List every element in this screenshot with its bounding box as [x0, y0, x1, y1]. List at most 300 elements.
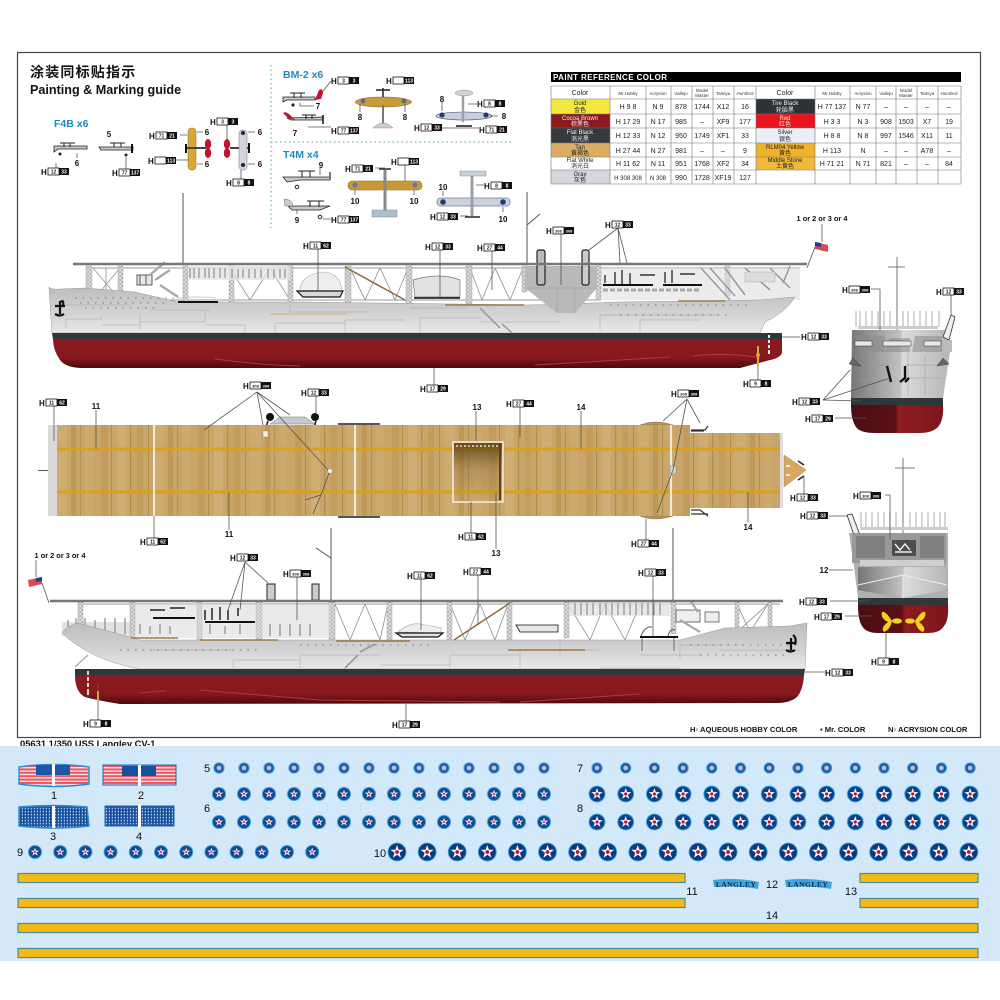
callout tags: top ship: [303, 221, 829, 394]
tag H27/44: [463, 568, 491, 577]
paint table codes, right half: –: [904, 161, 908, 168]
tag H27/44 lower: 27: [641, 542, 646, 548]
paint table codes, left half: 950: [675, 133, 687, 140]
aircraft callout tags: [41, 77, 512, 225]
paint reference table: Vallejo: [879, 91, 893, 96]
tag H17/29: 17: [824, 614, 829, 620]
tag H12/33: H: [301, 389, 307, 398]
paint table codes, left half: 9: [743, 148, 747, 155]
tag H9/8: 9: [882, 660, 885, 666]
ship port side view (bow right): 1 or 2 or 3 or 4: [35, 551, 86, 560]
tag H12/33 lower: H: [792, 398, 798, 407]
tag H11/62 lower: 11: [150, 540, 155, 546]
tag H12/33: 12: [240, 556, 245, 562]
colour system legend: ▪ Mr. COLOR: [820, 725, 866, 734]
decal flags 1-4: [19, 764, 176, 828]
tag F4B H3/3: [210, 118, 238, 127]
paint reference table: Gold: [574, 101, 586, 107]
paint table codes, left half: 1728: [694, 175, 710, 182]
tag BM-2 H71/21: [479, 126, 507, 135]
tag H9/8: H: [743, 380, 749, 389]
paint table codes, right half: –: [947, 104, 951, 111]
tag T4M H12/33: 33: [450, 214, 456, 220]
tag H12/33 right: H: [638, 569, 644, 578]
tag H308: 308: [292, 572, 300, 576]
paint table codes, left half: XF2: [717, 161, 730, 168]
paint table codes, left half: 1768: [694, 161, 710, 168]
paint table codes, right half: 19: [945, 119, 953, 126]
tag H11/62 left: 11: [49, 400, 54, 406]
tag H11/62 elevator: H: [458, 533, 464, 542]
roundels row 8 lower: [589, 814, 978, 830]
aircraft: T4M views: 10: [410, 197, 419, 206]
tag F4B H77/137: 77: [122, 170, 127, 176]
paint table codes, left half: –: [700, 119, 704, 126]
decal numbers: 13: [845, 886, 857, 898]
paint table codes, left half: –: [700, 148, 704, 155]
tag H9/8: 8: [105, 722, 108, 728]
tag H12/33 top: 33: [820, 514, 826, 520]
tag BM-2 H12/33: [414, 124, 442, 133]
paint reference table: RLM04 Yellow: [766, 145, 805, 151]
tag H17/29: H: [814, 613, 820, 622]
tag H17/29: 17: [815, 416, 820, 422]
paint reference table: 棕黑色: [571, 120, 589, 128]
tag T4M H71/21: 21: [365, 166, 371, 172]
tag T4M H71/21: [345, 165, 373, 174]
paint table codes, left half: H 27 44: [616, 148, 640, 155]
paint reference table: 黄色: [779, 149, 791, 157]
tag T4M H71/21: 71: [355, 166, 360, 172]
tag H17/29: [420, 385, 448, 394]
paint table codes, left half: N 17: [651, 119, 665, 126]
tag H12/33 right: [638, 569, 666, 578]
tag H9/8: 9: [754, 382, 757, 388]
deck callout tags: [39, 382, 818, 549]
tag H17/29: 29: [825, 416, 831, 422]
tag H27/44: 27: [487, 246, 492, 252]
aircraft: T4M views: 10: [499, 215, 508, 224]
tag BM-2 H77/137: 137: [350, 128, 358, 134]
boats and tan bars: [396, 633, 443, 637]
aircraft: BM-2 views: 7: [293, 129, 298, 138]
tag F4B H3/3: 3: [232, 120, 235, 126]
paint table codes, right half: 997: [880, 133, 892, 140]
tag H12/33 boot: 33: [819, 600, 825, 606]
paint reference table: Vallejo: [674, 91, 688, 96]
tag H308: [853, 492, 881, 501]
tag H17/29: [392, 721, 420, 730]
tag H12/33 boot: 12: [835, 670, 840, 676]
tag H12/33 boot: 12: [811, 334, 816, 340]
paint table codes, right half: [818, 104, 953, 168]
tag H9/8: [871, 658, 899, 667]
aircraft: F4B views: 6: [258, 160, 263, 169]
paint table codes, left half: N 12: [651, 133, 665, 140]
paint reference table: 土黄色: [776, 162, 794, 170]
tag H12/33 boot: H: [799, 598, 805, 607]
anchor: [786, 635, 796, 652]
tag BM-2 H71/21: 71: [489, 128, 494, 134]
tag H12/33: 33: [956, 290, 962, 296]
paint reference table: Cocoa Brown: [562, 116, 598, 122]
paint table codes, left half: H 308 308: [614, 176, 642, 182]
paint table codes, left half: 33: [741, 133, 749, 140]
paint table codes, left half: 951: [675, 161, 687, 168]
stern view: [820, 458, 948, 658]
tag H308: 308: [263, 384, 270, 388]
title: 涂装同标贴指示: [30, 64, 136, 80]
tag F4B H8/8: [226, 179, 254, 188]
paint reference table: 灰色: [574, 176, 586, 184]
tag F4B H77/137: [112, 169, 140, 178]
tag H12/33: [936, 288, 964, 297]
tag H12/33: H: [230, 554, 236, 563]
tag F4B H113: 113: [167, 158, 175, 164]
aircraft: F4B views: 6: [75, 159, 80, 168]
decal numbers: [17, 763, 857, 922]
tag T4M H12/33: [430, 213, 458, 222]
colour system legend: H▫ AQUEOUS HOBBY COLOR: [690, 725, 798, 734]
tag H17/29: 29: [834, 614, 840, 620]
paint table codes, left half: N 308: [650, 176, 667, 182]
tag BM-2 H12/33: H: [414, 124, 420, 133]
truss band: [62, 600, 780, 640]
tag H308: 308: [252, 384, 260, 388]
paint table codes, left half: H 11 62: [616, 161, 640, 168]
decal numbers: 10: [374, 848, 386, 860]
tag F4B H3/3: 3: [221, 120, 224, 126]
tag H12/33 boot: 33: [845, 670, 851, 676]
tag T4M H77/137: 77: [341, 218, 346, 224]
tag BM-2 H3/3: 3: [353, 78, 356, 84]
tag BM-2 H8/8: 8: [499, 102, 502, 108]
tag H12/33 lower: 12: [802, 400, 807, 406]
paint table codes, left half: N 11: [651, 161, 665, 168]
tag F4B H71/21: 21: [169, 134, 175, 140]
hull upper: [62, 623, 807, 669]
aircraft: T4M views: 10: [351, 197, 360, 206]
roundels row 8 upper: [589, 786, 978, 802]
tag H12/33 bow tip: 12: [800, 496, 805, 502]
tag H27/44: 27: [473, 570, 478, 576]
colour system legend: [690, 725, 968, 734]
tag H12/33 funnels: [605, 221, 633, 230]
paint reference table: Mr.Hobby: [618, 91, 638, 96]
bow tip: [784, 455, 806, 487]
paint table codes, right half: –: [925, 161, 929, 168]
callout tags: bottom ship: [83, 554, 853, 730]
paint table codes, right half: 908: [880, 119, 892, 126]
tag BM-2 H113: [386, 77, 414, 86]
decal sheet: [0, 746, 1000, 961]
paint table codes, left half: XF1: [717, 133, 730, 140]
paint reference table: Tamiya: [920, 91, 935, 96]
roundels row 7: [591, 762, 976, 774]
tag H27/44 lower: [631, 540, 659, 549]
tag H12/33 funnels: H: [605, 221, 611, 230]
paint table codes, right half: –: [904, 148, 908, 155]
tag H12/33 lower: 33: [812, 400, 818, 406]
tag H308: 308: [555, 228, 563, 234]
tag H11/62: [407, 572, 435, 581]
paint table codes, left half: 127: [739, 175, 751, 182]
decal numbers: 4: [136, 831, 142, 843]
paint table codes, right half: 1546: [898, 133, 914, 140]
tag H12/33 bow tip: H: [790, 494, 796, 503]
tag F4B H71/21: H: [149, 132, 155, 141]
hull upper: [49, 287, 795, 333]
tag H27/44: [506, 400, 534, 409]
paint reference table: Mr.Hobby: [822, 91, 842, 96]
paint table codes, right half: H 3 3: [824, 119, 840, 126]
paint table codes, right half: H 8 8: [824, 133, 840, 140]
tag H11/62: 62: [427, 574, 433, 580]
aircraft section dividers and headings: F4B x6: [54, 118, 89, 130]
paint table codes, right half: 821: [880, 161, 892, 168]
paint table codes, right half: H 113: [823, 148, 841, 155]
tag H9/8: 8: [765, 382, 768, 388]
tag H9/8: H: [871, 658, 877, 667]
aircraft section dividers and headings: T4M x4: [283, 149, 319, 161]
paint table codes, right half: N: [860, 148, 866, 155]
yellow deck stripes: [18, 874, 978, 958]
tag H27/44: 44: [497, 246, 503, 252]
tag H12/33: H: [425, 243, 431, 252]
tag H308: H: [546, 227, 552, 236]
aircraft: F4B views: 5: [107, 130, 112, 139]
roundels row 6 lower: [212, 815, 551, 829]
tag H11/62: H: [303, 242, 309, 251]
bow view callouts: [792, 286, 964, 424]
tag F4B H12/33: 12: [51, 170, 56, 176]
ship port side view (bow right): [28, 528, 825, 721]
paint table codes, right half: –: [904, 104, 908, 111]
paint reference table: Master: [899, 93, 913, 98]
tag H12/33 right: 33: [658, 570, 664, 576]
tag H9/8: H: [83, 720, 89, 729]
tag H12/33 top: 12: [810, 514, 815, 520]
paint table codes, right half: N 77: [856, 104, 870, 111]
anchor: [55, 301, 65, 316]
paint reference table: Master: [695, 93, 709, 98]
tag BM-2 H8/8: [477, 100, 505, 109]
paint table codes, right half: 11: [945, 133, 953, 140]
tag BM-2 H71/21: H: [479, 126, 485, 135]
tag H11/62: 11: [313, 244, 318, 250]
paint reference table: Humbrol: [940, 91, 958, 96]
tag F4B H113: [148, 157, 176, 166]
tag H308: [546, 227, 574, 236]
paint table codes, left half: 878: [675, 104, 687, 111]
aircraft: BM-2 views: [283, 81, 507, 138]
tag BM-2 H113: H: [386, 77, 392, 86]
tag H12/33 boot: H: [801, 333, 807, 342]
paint reference table: 银色: [779, 135, 791, 143]
aircraft: BM-2 views: 8: [403, 113, 408, 122]
flight deck plan: 13: [473, 403, 482, 412]
paint table codes, right half: –: [947, 148, 951, 155]
tag H12/33 right: 12: [648, 570, 653, 576]
paint reference table: 消光白: [571, 162, 589, 170]
tag BM-2 H77/137: H: [331, 127, 337, 136]
ship starboard side view (bow left): 1 or 2 or 3 or 4: [797, 214, 848, 223]
paint table codes, right half: N 71: [856, 161, 870, 168]
tag H11/62: 11: [417, 574, 422, 580]
LANGLEY name decals: [713, 879, 832, 889]
aircraft: T4M views: 9: [295, 216, 300, 225]
flight deck plan: 11: [92, 402, 101, 411]
flight deck plan: 14: [744, 523, 753, 532]
tag BM-2 H8/8: H: [477, 100, 483, 109]
tag BM-2 H12/33: 33: [434, 126, 440, 132]
product caption: 05631 1/350 USS Langley CV-1: [20, 738, 156, 749]
paint reference table: Acrysion: [649, 91, 667, 96]
aircraft: T4M views: [283, 161, 510, 225]
tag F4B H71/21: 71: [159, 134, 164, 140]
paint table codes, left half: 16: [741, 104, 749, 111]
roundels row 5: [213, 762, 550, 774]
roundels row 6 upper: [212, 787, 551, 801]
paint reference table: Silver: [777, 130, 793, 136]
tag H308 right: 308: [680, 392, 688, 396]
tag H12/33 top: H: [800, 512, 806, 521]
tag H308 right: [671, 390, 699, 399]
tag H11/62: [303, 242, 331, 251]
tag F4B H71/21: [149, 132, 177, 141]
tag H27/44: H: [477, 244, 483, 253]
tag H308: H: [243, 382, 249, 391]
paint table codes, right half: H 77 137: [818, 104, 846, 111]
paint reference table: Color: [777, 90, 794, 97]
paint table codes, left half: 990: [675, 175, 687, 182]
decal numbers: 9: [17, 847, 23, 859]
tag H17/29: [814, 613, 842, 622]
tag BM-2 H77/137: 77: [341, 128, 346, 134]
paint reference table: Middle Stone: [767, 158, 803, 164]
tag H12/33 boot: [801, 333, 829, 342]
tag BM-2 H77/137: [331, 127, 359, 136]
tag F4B H12/33: [41, 168, 69, 177]
tag T4M H113: H: [391, 158, 397, 167]
tag BM-2 H71/21: 21: [499, 128, 505, 134]
paint reference table: Flat Black: [567, 130, 594, 136]
decal numbers: 7: [577, 763, 583, 775]
propellers: [882, 612, 925, 632]
paint reference table: [551, 72, 961, 184]
tag T4M H12/33: H: [430, 213, 436, 222]
tag T4M H113: [391, 158, 419, 167]
flight deck plan: 11: [225, 530, 234, 539]
roundels row 10: [388, 843, 978, 861]
tag H308: H: [842, 286, 848, 295]
aircraft: F4B views: 6: [258, 128, 263, 137]
decal numbers: 6: [204, 803, 210, 815]
instruction frame: [18, 52, 980, 738]
paint table codes, left half: N 27: [651, 148, 665, 155]
tag H12/33 lower: [792, 398, 820, 407]
decal numbers: 12: [766, 879, 778, 891]
decal numbers: 14: [766, 910, 778, 922]
tag H12/33: 33: [445, 244, 451, 250]
paint reference table: Red: [779, 116, 791, 122]
tag H9/8: [83, 720, 111, 729]
tag H11/62: 62: [323, 244, 329, 250]
LANGLEY name decals: LANGLEY: [788, 880, 828, 889]
tag H12/33: 33: [250, 556, 256, 562]
truss band: [86, 262, 800, 304]
aircraft: T4M views: 10: [439, 183, 448, 192]
tag H308: [842, 286, 870, 295]
ship starboard side view (bow left): [49, 192, 848, 385]
tag F4B H8/8: 8: [248, 180, 251, 186]
tag H27/44: [477, 244, 505, 253]
bow front view: [849, 257, 955, 433]
tag H12/33: 33: [321, 390, 327, 396]
decal numbers: 8: [577, 803, 583, 815]
paint table codes, left half: XF19: [715, 175, 731, 182]
tag T4M H8/8: [484, 182, 512, 191]
tag H12/33 funnels: 12: [615, 222, 620, 228]
colour system legend: N▫ ACRYSION COLOR: [888, 725, 968, 734]
paint table codes, left half: [614, 104, 751, 182]
tag BM-2 H12/33: 12: [424, 126, 429, 132]
tag H308 right: 308: [691, 392, 698, 396]
tag H11/62 lower: [140, 538, 168, 547]
paint table codes, right half: N 3: [858, 119, 869, 126]
tag BM-2 H3/3: H: [331, 77, 337, 86]
aircraft section dividers and headings: BM-2 x6: [283, 69, 323, 81]
tag F4B H12/33: 33: [61, 170, 67, 176]
paint table codes, left half: XF9: [717, 119, 730, 126]
title: Painting & Marking guide: [30, 83, 181, 97]
paint reference table: Acrysion: [854, 91, 872, 96]
paint table codes, left half: N 9: [653, 104, 664, 111]
tag H17/29: 17: [430, 386, 435, 392]
aircraft section dividers and headings: [54, 65, 513, 228]
tag H9/8: 8: [893, 660, 896, 666]
paint table codes, right half: X11: [921, 133, 933, 140]
paint table codes, left half: 1744: [694, 104, 710, 111]
flag: top: [807, 242, 828, 268]
funnel block: [525, 266, 597, 313]
tag BM-2 H3/3: 3: [342, 78, 345, 84]
tag H27/44 lower: H: [631, 540, 637, 549]
paint table codes, left half: –: [721, 148, 725, 155]
hull red and boot: [75, 675, 804, 704]
tag H12/33 bow tip: 33: [810, 496, 816, 502]
stern view callouts: [799, 492, 899, 667]
paint reference table: 轮胎黑: [776, 106, 794, 114]
tag H17/29: 29: [412, 722, 418, 728]
tag T4M H77/137: [331, 216, 359, 225]
paint table codes, left half: 34: [741, 161, 749, 168]
tag T4M H8/8: 8: [495, 184, 498, 190]
aircraft: BM-2 views: 8: [358, 113, 363, 122]
tag H308: H: [853, 492, 859, 501]
paint table codes, right half: 1503: [898, 119, 914, 126]
tag H12/33 boot: 12: [809, 600, 814, 606]
tag H12/33 top: [800, 512, 828, 521]
decal numbers: 1: [51, 790, 57, 802]
tag H308: 308: [862, 288, 869, 292]
paint reference table: 红色: [779, 120, 791, 128]
paint table codes, left half: 981: [675, 148, 687, 155]
tag BM-2 H8/8: 8: [488, 102, 491, 108]
decal numbers: 11: [686, 886, 698, 898]
tag T4M H8/8: H: [484, 182, 490, 191]
aircraft: BM-2 views: 8: [502, 112, 507, 121]
